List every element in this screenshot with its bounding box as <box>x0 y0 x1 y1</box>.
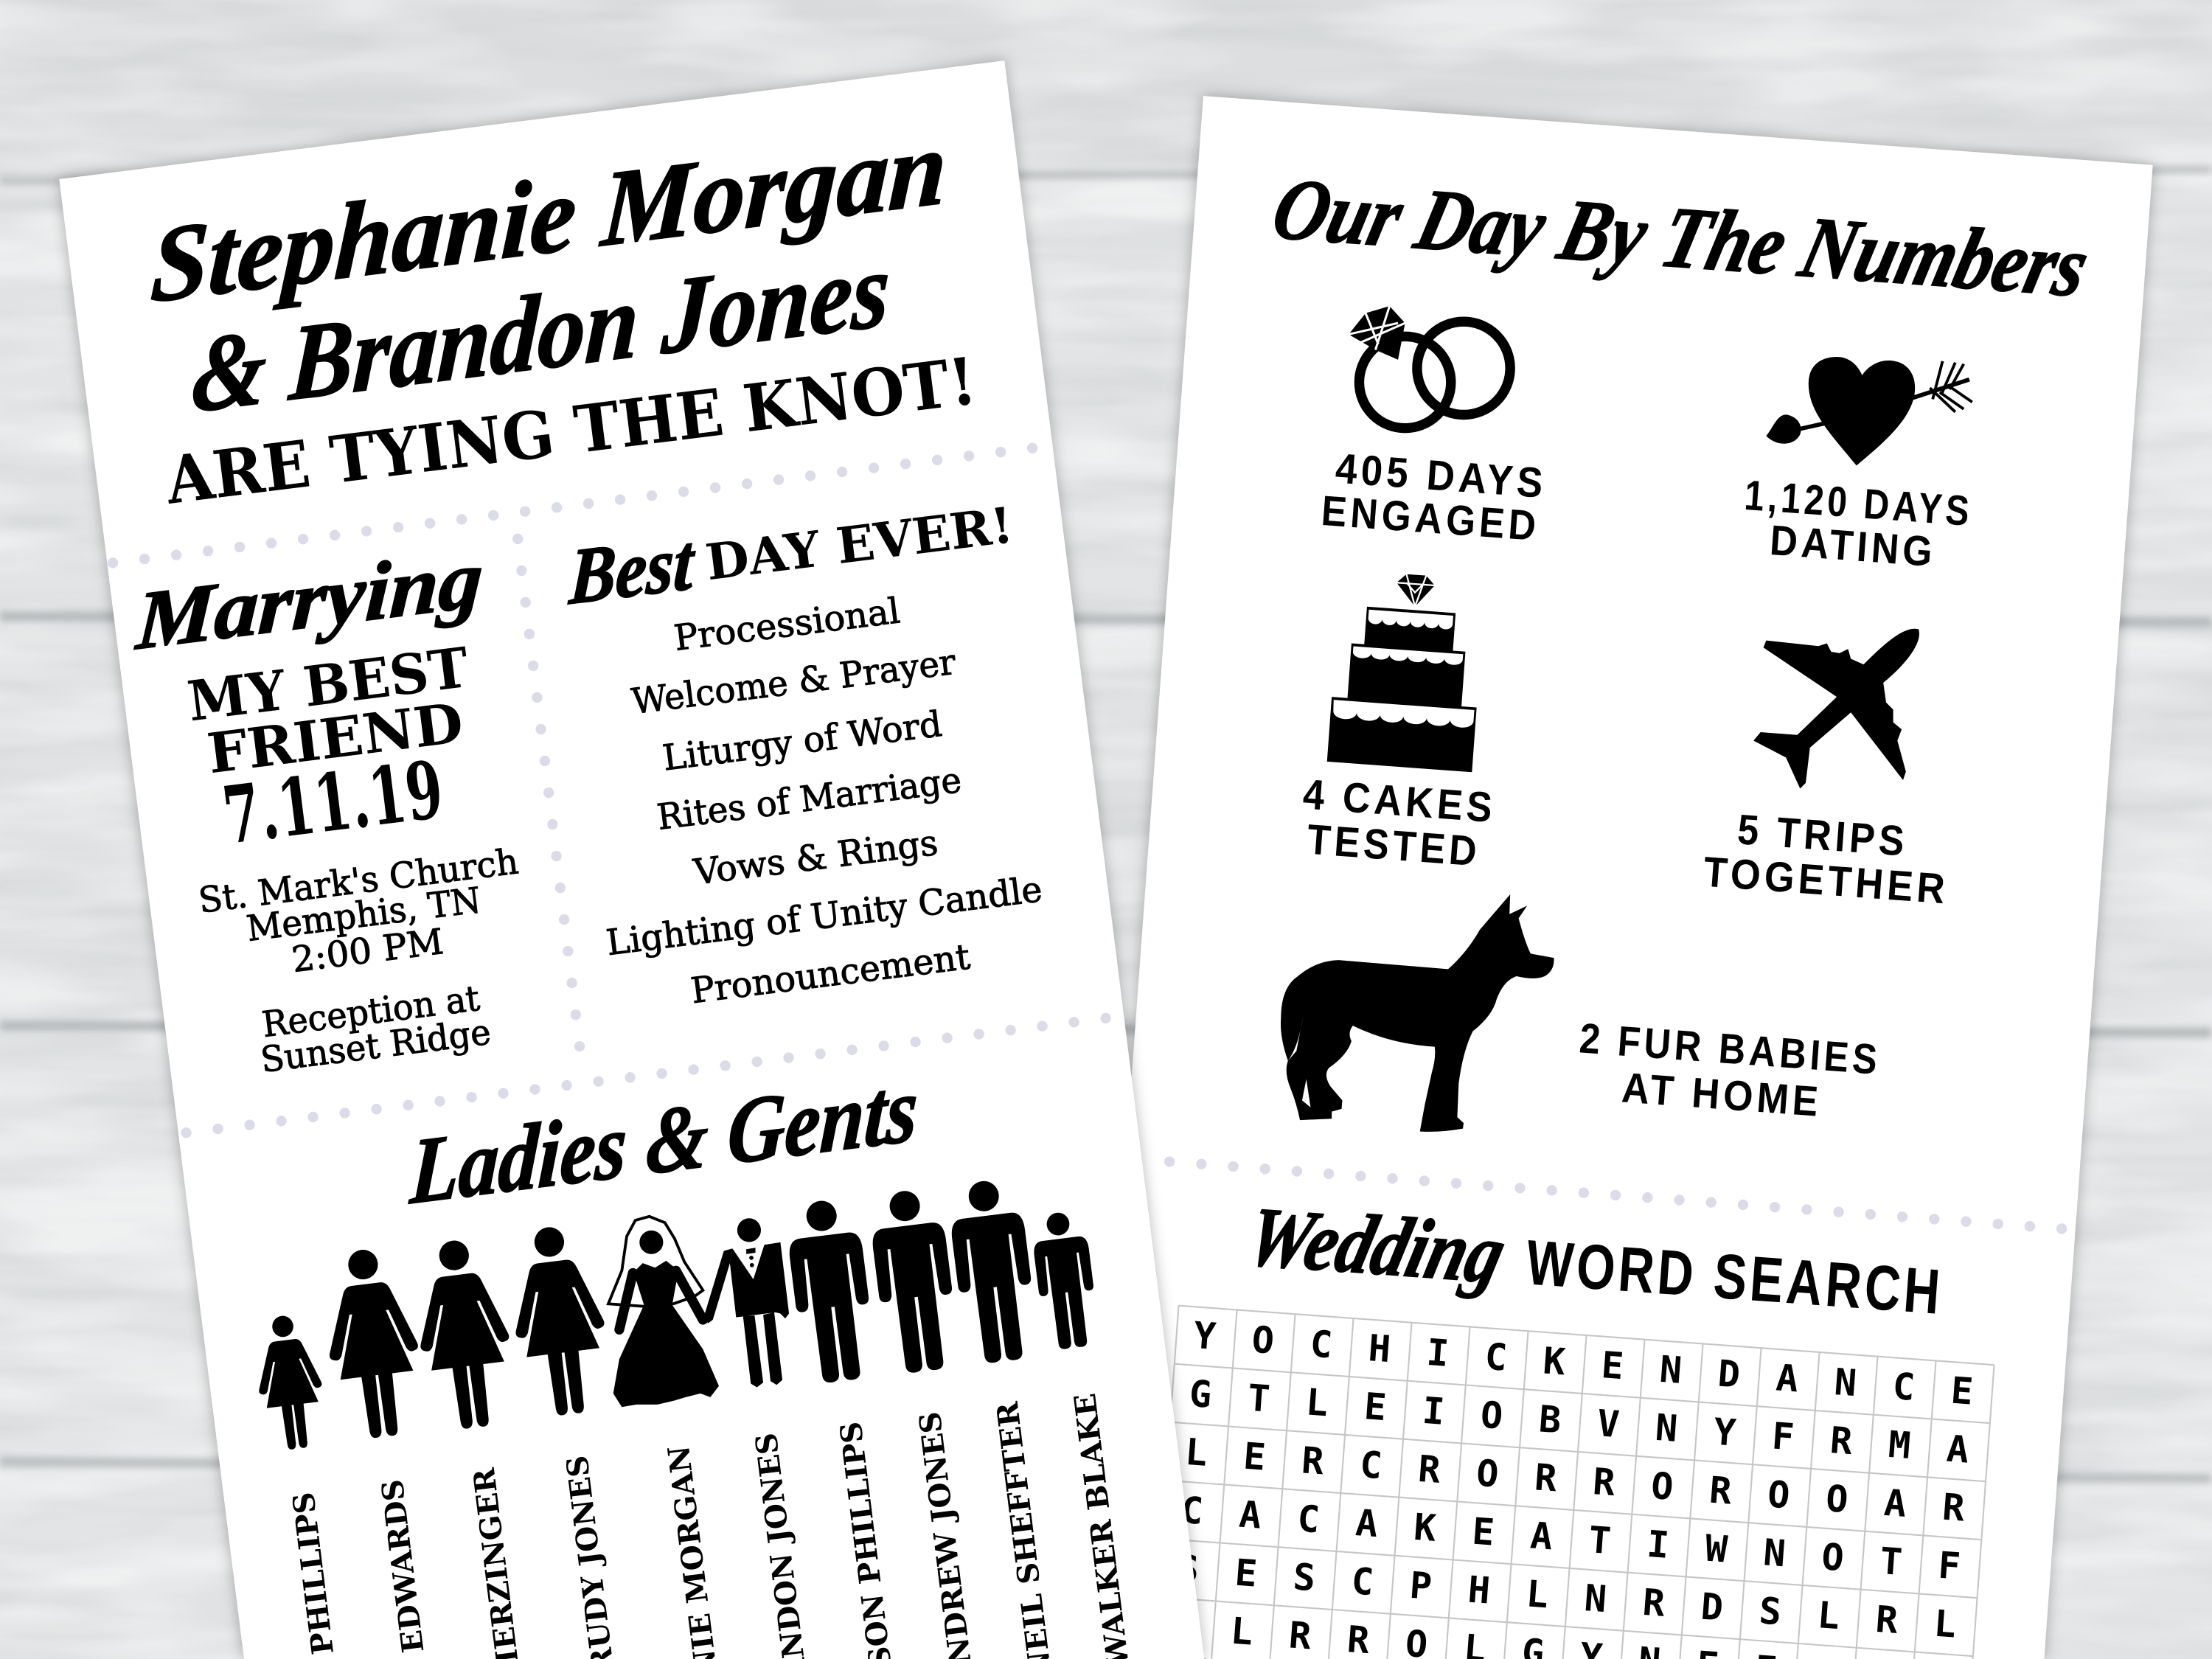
section: marrying my best friend: FRIEND <box>204 690 467 786</box>
figure: flower girl <box>250 1312 330 1453</box>
word search grid: CACAKEATIWNOTF <box>1180 1489 1962 1588</box>
heading: wedding word search: Wedding <box>1238 1191 1514 1301</box>
figure: groom <box>704 1218 789 1388</box>
list: order of ceremony: Processional <box>672 591 902 659</box>
section: marrying my best friend: Marrying <box>133 532 485 668</box>
list: order of ceremony: Lighting of Unity Candle <box>604 869 1045 964</box>
panel: right card, by the numbers and word search <box>1089 96 2153 1659</box>
word search grid: LERCRORROROOAR <box>1183 1430 1966 1530</box>
figure: best man <box>783 1197 878 1385</box>
icon: wedding cake <box>1327 574 1477 772</box>
heading: wedding word search <box>1238 1191 1946 1328</box>
icon: heart with arrow <box>1766 357 1972 465</box>
text: 4 cakes tested: 4 CAKES <box>1301 771 1498 832</box>
text: 405 days engaged: ENGAGED <box>1320 487 1541 550</box>
text: 405 days engaged: 405 DAYS <box>1334 445 1548 507</box>
text: ceremony details: Reception at <box>260 978 482 1046</box>
text: ceremony details: St. Mark's Church <box>196 841 521 922</box>
text: 1,120 days dating: 1,120 DAYS <box>1743 472 1975 535</box>
title: couple names <box>148 105 950 436</box>
word search grid <box>1153 1306 1994 1659</box>
text: 5 trips together: TOGETHER <box>1702 849 1950 914</box>
figure: bride <box>608 1217 719 1407</box>
list: order of ceremony: Liturgy of Word <box>661 704 944 779</box>
word search grid: YOCHICKENDANCE <box>1192 1314 1975 1413</box>
word search grid: SESCPHLNRDSLRL <box>1175 1547 1958 1646</box>
text: 405 days engaged <box>1320 445 1548 550</box>
text: ceremony details <box>196 841 521 1081</box>
figure: bridesmaid 2 <box>408 1235 520 1433</box>
text: 5 trips together: 5 TRIPS <box>1736 806 1910 866</box>
wedding party names: EDWARDS <box>375 1478 431 1655</box>
heading: best day ever <box>567 495 1016 622</box>
list: order of ceremony: Pronouncement <box>689 937 973 1012</box>
word search grid: GTLEIOBVNYFRMA <box>1188 1372 1970 1472</box>
text: ceremony details: Memphis, TN <box>244 880 483 950</box>
heading: our day by the numbers: Our Day By The Numbers <box>1264 160 2098 315</box>
list: order of ceremony: Welcome & Prayer <box>630 642 958 723</box>
right card sheet <box>1089 96 2153 1659</box>
text: 4 cakes tested <box>1301 771 1498 876</box>
text: ceremony details: Sunset Ridge <box>259 1012 493 1081</box>
left card sheet <box>59 60 1204 1659</box>
icon: wedding rings <box>1349 306 1510 428</box>
section: marrying my best friend <box>133 532 485 863</box>
title: couple names: Stephanie Morgan <box>148 105 950 326</box>
heading: best day ever: DAY EVER! <box>703 495 1016 591</box>
icon: dog silhouette <box>1281 894 1554 1132</box>
section: marrying my best friend: MY BEST <box>184 635 472 734</box>
wedding party figures <box>250 1177 1101 1453</box>
heading: wedding word search: WORD SEARCH <box>1524 1227 1946 1328</box>
icon: airplane <box>1753 629 1919 789</box>
list: order of ceremony: Rites of Marriage <box>655 760 964 838</box>
text: 2 fur babies at home <box>1578 1015 1882 1126</box>
text: 1,120 days dating <box>1743 472 1975 576</box>
title: couple names: & Brandon Jones <box>189 228 892 436</box>
subtitle: are tying the knot: ARE TYING THE KNOT! <box>161 342 981 519</box>
heading: best day ever: Best <box>567 518 698 622</box>
figure: groomsman 2 <box>945 1177 1041 1366</box>
wedding party names <box>286 1391 1136 1659</box>
text: 2 fur babies at home: AT HOME <box>1620 1064 1823 1126</box>
text: 1,120 days dating: DATING <box>1768 517 1938 576</box>
list: order of ceremony: Vows & Rings <box>691 823 940 894</box>
figure: ring bearer <box>1029 1209 1101 1352</box>
text: 2 fur babies at home: 2 FUR BABIES <box>1578 1015 1882 1084</box>
heading: ladies and gents: Ladies & Gents <box>408 1057 920 1224</box>
text: 4 cakes tested: TESTED <box>1306 816 1482 876</box>
figure: maid of honor <box>504 1222 615 1419</box>
text: 5 trips together <box>1702 806 1950 914</box>
figure: groomsman 1 <box>866 1186 961 1376</box>
text: ceremony details: 2:00 PM <box>290 922 445 981</box>
section: marrying my best friend: 7.11.19 <box>218 743 448 863</box>
figure: bridesmaid 1 <box>317 1245 428 1442</box>
list: order of ceremony <box>604 591 1045 1012</box>
panel: left card, wedding program <box>59 60 1204 1659</box>
